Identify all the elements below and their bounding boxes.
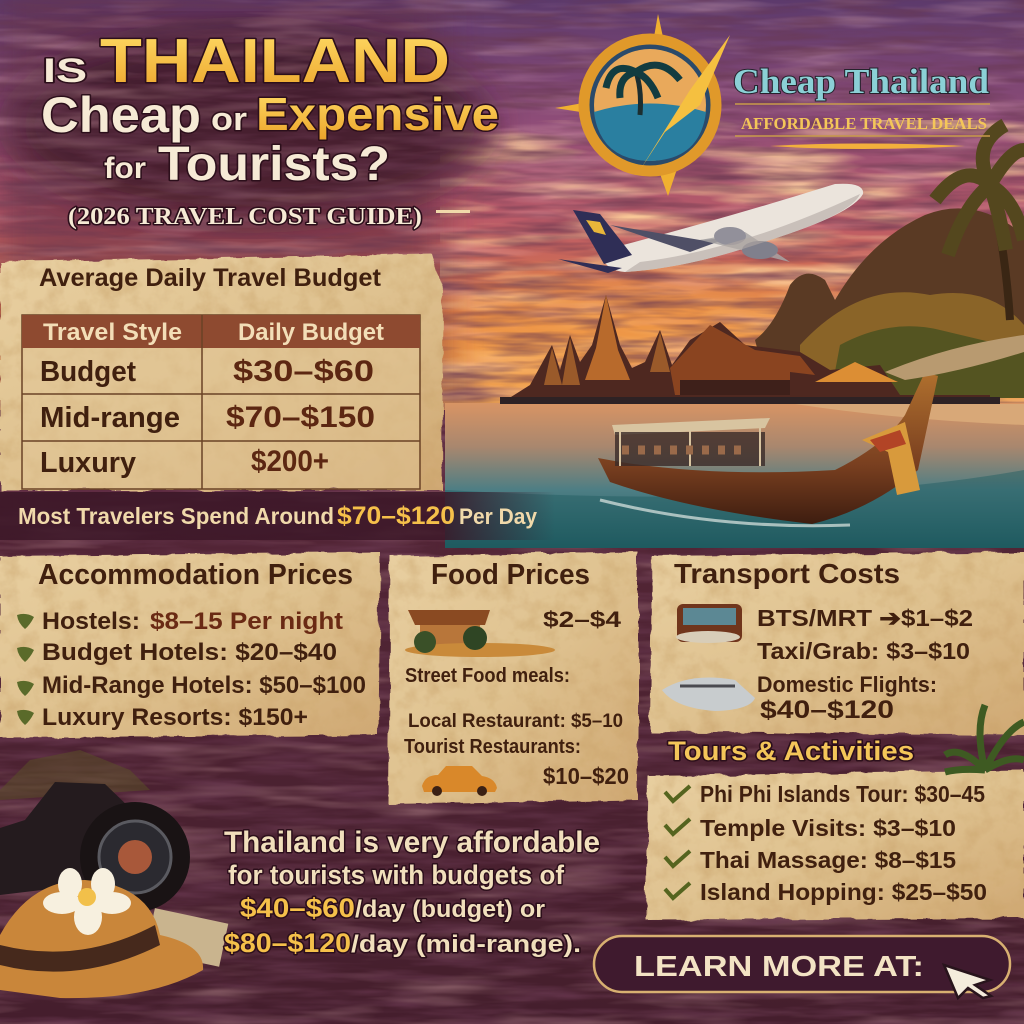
heading: Accommodation Prices bbox=[38, 559, 353, 591]
logo text bbox=[733, 62, 990, 149]
list: Luxury Resorts: $150+ bbox=[42, 704, 308, 731]
budget table: Travel Style bbox=[43, 319, 182, 346]
summary text: $80–$120 bbox=[224, 928, 351, 958]
list: Budget Hotels: $20–$40 bbox=[42, 639, 337, 666]
checklist bbox=[665, 781, 987, 905]
checklist: Island Hopping: $25–$50 bbox=[700, 879, 987, 905]
budget table: Budget bbox=[40, 356, 136, 388]
button: learn more: LEARN MORE AT: bbox=[634, 951, 924, 983]
budget table: Mid-range bbox=[40, 402, 180, 434]
icon: floating restaurant bbox=[405, 610, 555, 657]
panel: accommodation prices bbox=[0, 552, 380, 738]
list: $8–15 Per night bbox=[150, 608, 343, 635]
checklist: Phi Phi Islands Tour: $30–45 bbox=[700, 781, 985, 807]
heading: Tours & Activities bbox=[668, 736, 914, 766]
summary text: /day (budget) or bbox=[355, 896, 545, 923]
panel: food prices: Local Restaurant: $5–10 bbox=[408, 711, 623, 732]
callout: most travelers spend: $70–$120 bbox=[337, 502, 455, 530]
logo text: Cheap Thailand bbox=[733, 62, 990, 101]
budget table: $70–$150 bbox=[226, 401, 375, 434]
icon: orange taxi bbox=[422, 766, 497, 796]
callout: most travelers spend: Most Travelers Spend Around bbox=[18, 503, 334, 529]
checklist: Thai Massage: $8–$15 bbox=[700, 847, 956, 873]
button: learn more bbox=[594, 936, 1010, 998]
title: THAILAND bbox=[100, 27, 450, 96]
summary text bbox=[224, 826, 600, 958]
title: (2026 TRAVEL COST GUIDE) bbox=[68, 204, 422, 230]
scene: long-tail boat bbox=[598, 335, 1024, 526]
title bbox=[41, 27, 499, 230]
list bbox=[17, 608, 366, 731]
panel: average daily travel budget bbox=[0, 254, 443, 490]
scene: temple skyline bbox=[500, 295, 1024, 425]
scene: airplane bbox=[558, 184, 863, 273]
panel: transport costs: Domestic Flights: bbox=[757, 672, 937, 697]
panel: food prices: $2–$4 bbox=[543, 607, 622, 632]
title: or bbox=[211, 101, 247, 137]
summary text: for tourists with budgets of bbox=[228, 860, 565, 890]
scene: mountains and palm bbox=[755, 125, 1024, 398]
list: Mid-Range Hotels: $50–$100 bbox=[42, 672, 366, 699]
title: Expensive bbox=[256, 88, 499, 140]
icon: palm plant bbox=[945, 705, 1024, 772]
icon: domestic transport bbox=[662, 678, 755, 711]
icon: cursor arrow bbox=[944, 965, 991, 998]
budget table bbox=[22, 315, 420, 489]
summary text: $40–$60 bbox=[240, 893, 355, 923]
title: IS bbox=[43, 52, 87, 90]
title: Cheap bbox=[41, 87, 201, 143]
panel: transport costs: BTS/MRT ➔$1–$2 bbox=[757, 605, 973, 631]
panel: transport costs bbox=[650, 552, 1024, 735]
logo emblem bbox=[555, 14, 730, 196]
summary text: /day (mid-range). bbox=[351, 931, 581, 958]
heading: Average Daily Travel Budget bbox=[39, 264, 382, 292]
illustration: camera, hat and flower bbox=[0, 750, 228, 998]
callout: most travelers spend bbox=[0, 492, 555, 540]
icon: train bbox=[676, 604, 742, 643]
summary text: Thailand is very affordable bbox=[224, 826, 600, 859]
heading: Transport Costs bbox=[674, 558, 900, 589]
list: Hostels: bbox=[42, 608, 140, 635]
budget table: Luxury bbox=[40, 447, 136, 479]
heading: Food Prices bbox=[431, 559, 590, 591]
title: for bbox=[104, 152, 146, 185]
budget table: Daily Budget bbox=[238, 319, 384, 346]
scene: sea bbox=[445, 403, 1024, 548]
panel: food prices: Street Food meals: bbox=[405, 665, 570, 687]
panel: transport costs: Taxi/Grab: $3–$10 bbox=[757, 638, 970, 664]
logo text: AFFORDABLE TRAVEL DEALS bbox=[741, 114, 987, 133]
panel: tours and activities bbox=[646, 736, 1024, 920]
callout: most travelers spend: Per Day bbox=[459, 504, 538, 529]
title: Tourists? bbox=[158, 138, 390, 191]
checklist: Temple Visits: $3–$10 bbox=[700, 815, 956, 841]
panel: transport costs: $40–$120 bbox=[760, 696, 894, 724]
panel: food prices: $10–$20 bbox=[543, 763, 629, 789]
panel: food prices bbox=[388, 552, 638, 804]
budget table: $200+ bbox=[251, 445, 329, 478]
panel: food prices: Tourist Restaurants: bbox=[404, 736, 581, 758]
budget table: $30–$60 bbox=[233, 355, 374, 388]
